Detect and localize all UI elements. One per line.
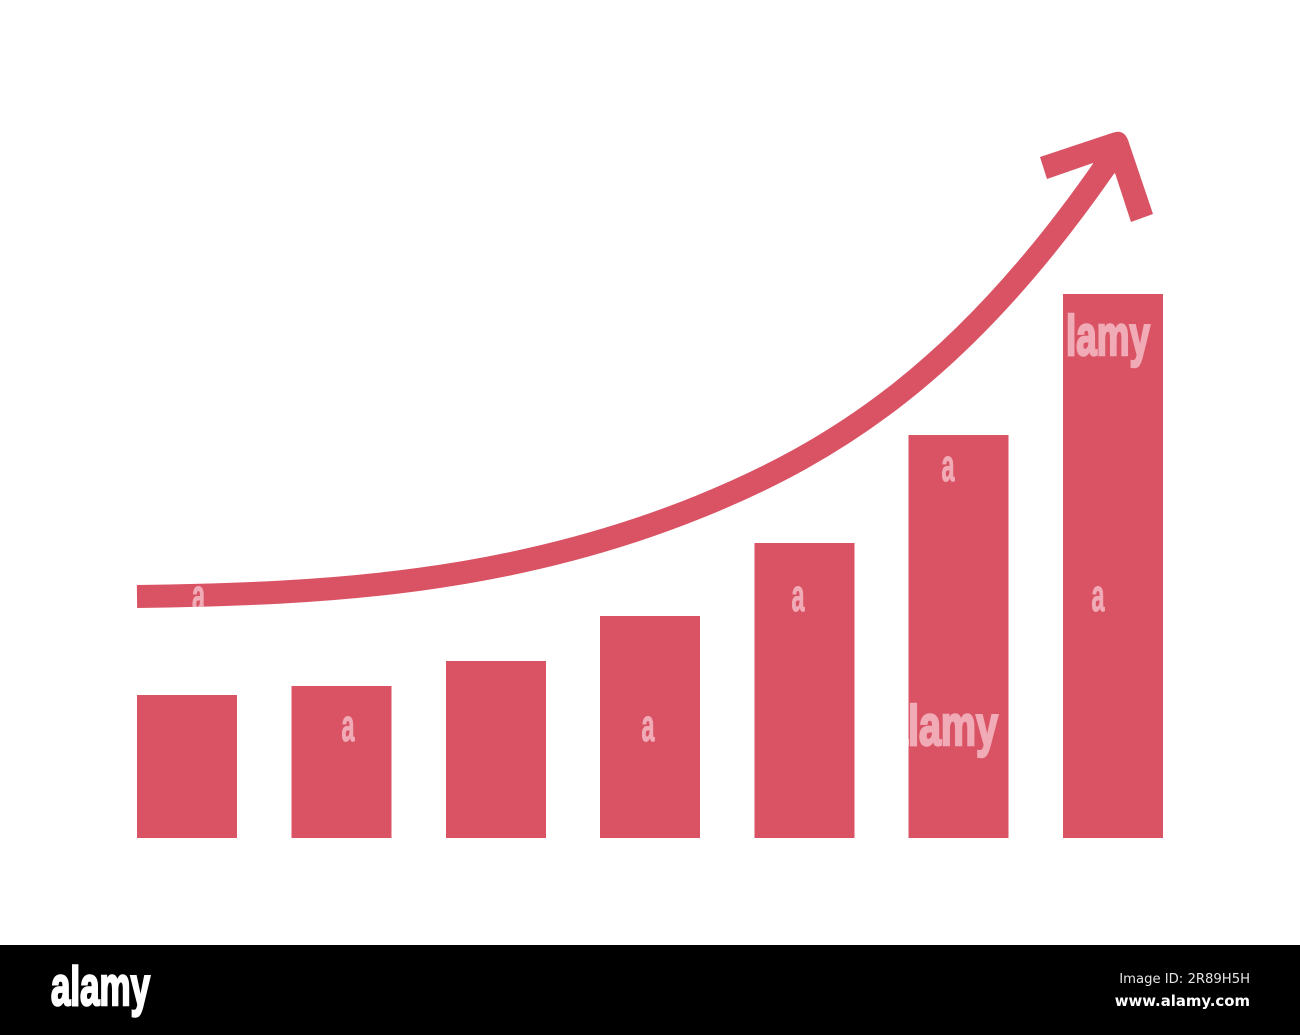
arrow head [1040,132,1153,222]
arrow shaft [137,168,1104,596]
watermark letters on bars: a [642,700,655,751]
bar 7 [1063,294,1163,838]
bar 5 [754,543,854,838]
footer website: www.alamy.com [1115,992,1250,1010]
bar 3 [446,661,546,838]
bar 1 [137,695,237,838]
watermark letter on arrow line: a [192,570,206,621]
watermark: lamy on bar 7: lamy [1066,304,1150,368]
footer image id: Image ID: 2R89H5H [1119,972,1250,987]
watermark: alamy on bar 6: alamy [886,694,998,758]
footer band [0,945,1300,1035]
footer logo: alamy [51,955,150,1017]
growth arrow [137,132,1153,596]
bar 2 [292,686,392,838]
bar chart [137,294,1163,838]
bar 4 [600,616,700,838]
watermark letters on bars: a [342,700,355,751]
watermark letters on bars: a [1092,570,1105,621]
watermark letters on bars [342,440,1105,751]
bar 6 [908,435,1008,838]
watermark letters on bars: a [792,570,805,621]
watermark letters on bars: a [942,440,955,491]
